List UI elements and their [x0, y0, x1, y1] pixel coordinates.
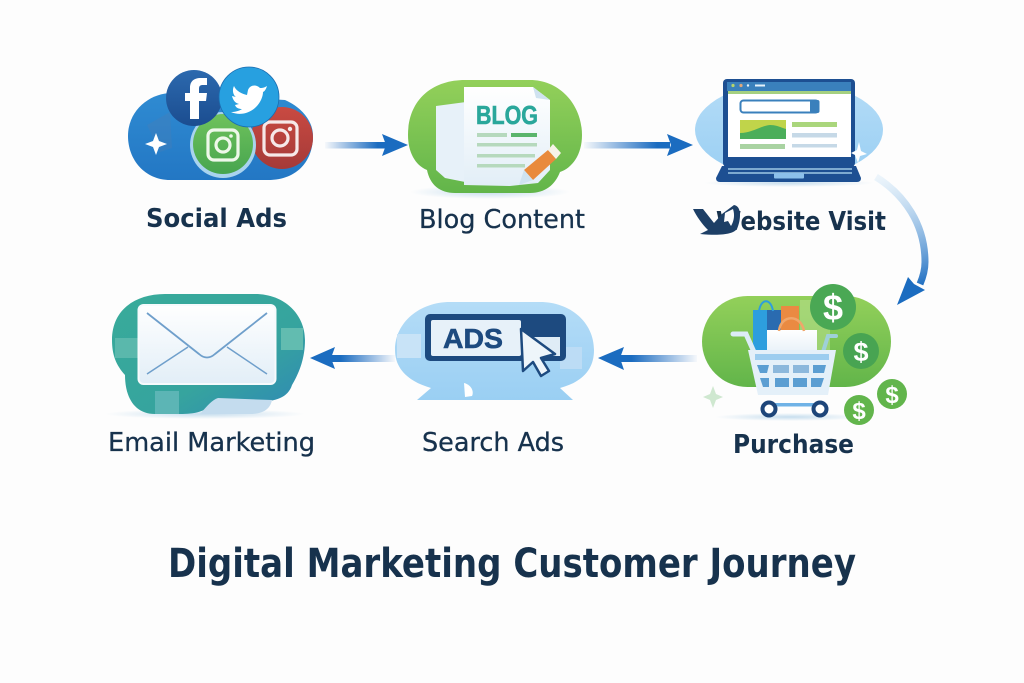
icon: cursor [521, 329, 555, 376]
laptop lid [723, 79, 855, 167]
coin 4 [877, 379, 907, 409]
arrow: social to blog [325, 134, 408, 156]
lower envelope tray [200, 398, 272, 414]
cloud background [128, 93, 313, 180]
coin 4: $ [885, 382, 899, 409]
coin 1: $ [823, 287, 843, 328]
icon: facebook [166, 70, 222, 126]
icon: twitter [219, 67, 279, 127]
arrow: search to email [310, 347, 395, 369]
blob shadow [105, 409, 305, 419]
browser top bar [727, 82, 851, 91]
light blue blob [395, 302, 594, 400]
label: email marketing: Email Marketing [108, 428, 315, 458]
title: Digital Marketing Customer Journey [168, 541, 856, 587]
icon: sparkle [145, 133, 167, 155]
icon: distorted W mark [693, 205, 740, 235]
area chart [740, 120, 786, 139]
label: purchase: Purchase [733, 430, 854, 460]
laptop shadow [704, 179, 874, 187]
icon: sparkle [851, 142, 867, 163]
arrow: purchase to search [598, 347, 697, 370]
search bar [740, 100, 818, 112]
envelope [138, 305, 276, 384]
ads text: ADS [443, 323, 503, 354]
label: social ads: Social Ads [146, 204, 287, 234]
coin 2 [843, 333, 879, 369]
browser page [728, 94, 851, 157]
coin 1 [810, 284, 856, 330]
green blob [408, 80, 582, 193]
arrow: blog to website [584, 134, 693, 156]
teal blob [112, 294, 305, 414]
panel: blog content [408, 80, 582, 199]
panel: purchase [702, 284, 907, 425]
blob shadow [410, 185, 570, 199]
blog heading: BLOG [476, 102, 538, 130]
ads button [425, 314, 566, 361]
light blue oval [695, 82, 883, 178]
panel: email marketing [105, 294, 305, 419]
label: blog content: Blog Content [419, 205, 585, 235]
icon: sparkle [703, 386, 723, 408]
cart shadow [715, 413, 865, 421]
front page [464, 87, 550, 186]
coin 2: $ [853, 337, 869, 367]
laptop base [716, 166, 861, 182]
page text lines [792, 122, 837, 127]
content lines [477, 133, 537, 168]
icon: instagram red [251, 107, 313, 169]
back page [436, 102, 470, 183]
shopping bags [753, 301, 817, 358]
panel: website visit [695, 79, 883, 187]
coin 3 [844, 395, 874, 425]
panel: social ads [128, 67, 313, 180]
keyboard [728, 168, 852, 174]
label: website visit: Website Visit [716, 207, 886, 237]
panel: search ads [395, 302, 594, 400]
arrow: website to purchase [876, 177, 925, 305]
icon: pencil [519, 144, 561, 185]
shopping cart [733, 334, 836, 416]
coin 3: $ [852, 398, 866, 425]
icon: instagram green [190, 112, 256, 178]
green pill [702, 296, 891, 387]
label: search ads: Search Ads [422, 428, 564, 458]
